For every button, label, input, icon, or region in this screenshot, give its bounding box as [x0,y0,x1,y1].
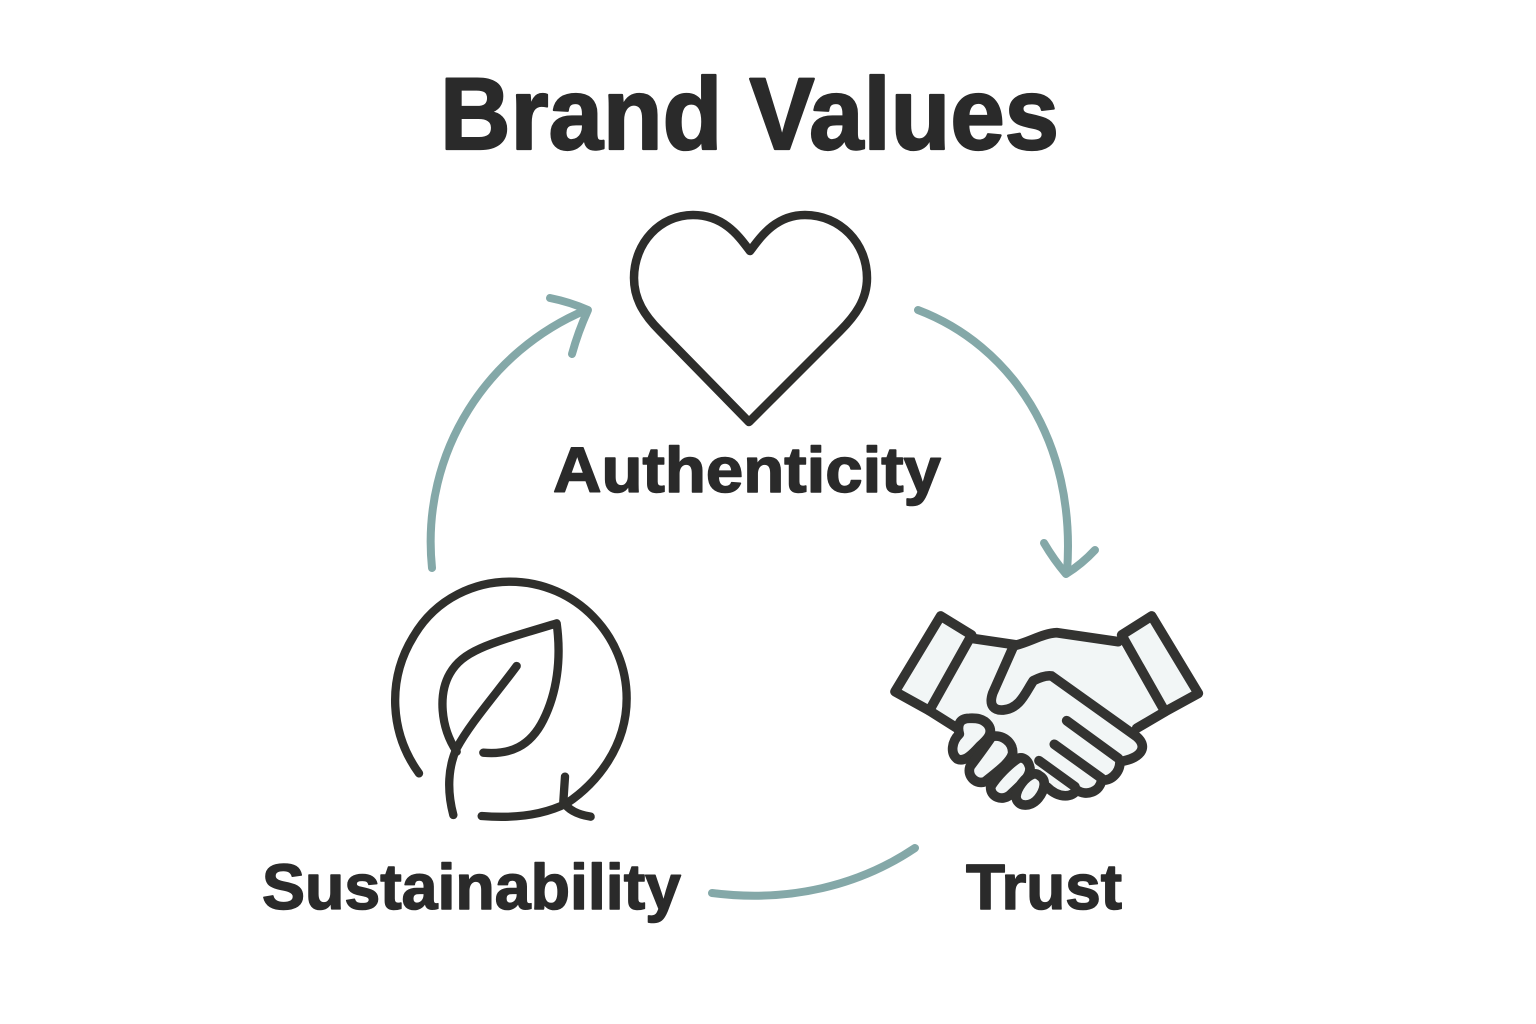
label: Trust: Trust [966,851,1122,923]
arrow: Trust to Sustainability [712,848,915,896]
icon: handshake [895,616,1198,805]
arrow: Authenticity to Trust [918,310,1095,574]
icon: leaf in circle [395,582,627,817]
arrow: Sustainability to Authenticity [431,298,588,568]
title: Brand Values [440,57,1059,171]
label: Authenticity: Authenticity [553,434,941,506]
icon: heart [634,215,867,422]
label: Sustainability: Sustainability [262,851,681,923]
